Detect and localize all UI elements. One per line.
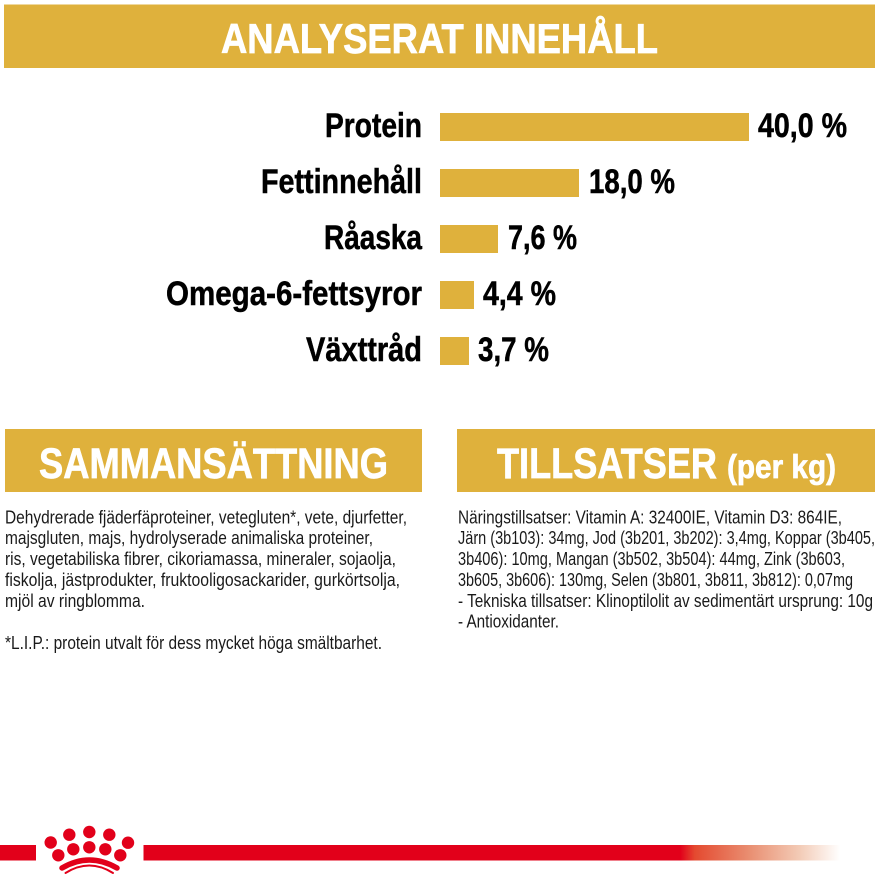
bar row: Växttråd: 3,7 % [478, 331, 549, 369]
text block: composition: mjöl av ringblomma. [5, 590, 145, 611]
bar row: Protein: 40,0 % [758, 107, 847, 145]
text block: composition: majsgluten, majs, hydrolyserade animaliska proteiner, [5, 527, 373, 548]
bar row: Råaska [324, 219, 577, 257]
bar row: Råaska: Råaska [324, 219, 423, 257]
bar row: Växttråd: Växttråd [306, 331, 422, 369]
title banner [4, 4, 875, 68]
title banner: ANALYSERAT INNEHÅLL [221, 15, 658, 62]
panel: additives heading: TILLSATSER [497, 440, 717, 488]
bar row: Protein [325, 107, 847, 145]
panel: composition heading [5, 429, 422, 492]
footer stripe: left [0, 845, 36, 860]
icon: crown logo [44, 826, 134, 873]
bar row: Fettinnehåll: 18,0 % [589, 163, 675, 201]
bar row: Omega-6-fettsyror: Omega-6-fettsyror [166, 275, 422, 313]
panel: composition heading: SAMMANSÄTTNING [39, 440, 388, 488]
bar row: Fettinnehåll [261, 163, 675, 201]
panel: additives heading [457, 429, 875, 492]
text block: composition: Dehydrerade fjäderfäproteiner, vetegluten*, vete, djurfetter, [5, 506, 407, 528]
bar chart: analysed content [166, 107, 847, 369]
bar row: Omega-6-fettsyror: 4,4 % [483, 275, 556, 313]
bar row: Råaska: 7,6 % [508, 219, 577, 257]
bar row: Växttråd [306, 331, 549, 369]
text block: additives [458, 506, 875, 632]
text block: composition [5, 506, 407, 653]
bar row: Fettinnehåll: Fettinnehåll [261, 163, 422, 201]
panel: additives heading: (per kg) [727, 448, 836, 485]
footer stripe: right fading [144, 845, 845, 860]
text block: additives: - Antioxidanter. [458, 610, 559, 632]
text block: composition: fiskolja, jästprodukter, fruktooligosackarider, gurkörtsolja, [5, 569, 400, 590]
bar row: Protein: Protein [325, 107, 422, 145]
text block: composition: *L.I.P.: protein utvalt för dess mycket höga smältbarhet. [5, 632, 382, 653]
text block: composition: ris, vegetabiliska fibrer, cikoriamassa, mineraler, sojaolja, [5, 548, 396, 569]
